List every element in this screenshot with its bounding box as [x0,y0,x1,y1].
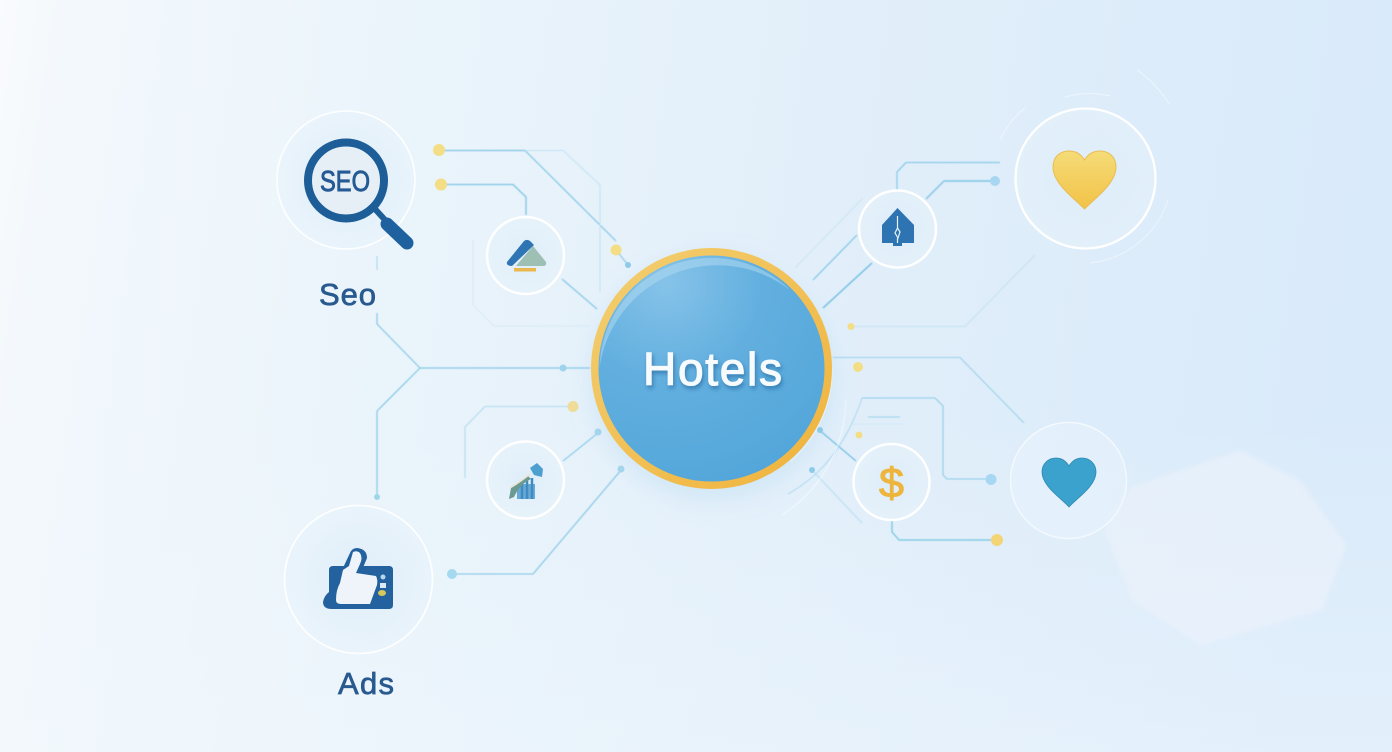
icon: blue heart [1042,458,1096,507]
connectors: seo and ads trunk [377,256,590,497]
translucent hexagon [1105,450,1346,645]
panel: dollar icon node [854,444,930,520]
panel: seo node [277,111,415,249]
panel: house icon node [859,190,936,268]
connector dots [374,144,1003,579]
panel: blue heart node [1010,422,1126,538]
panel: hotels hub [590,248,834,500]
connectors: lower left [452,406,622,574]
icon: dollar sign: $ [879,459,904,506]
decorative orbit arcs [782,70,1170,515]
connectors: upper right [795,162,1035,326]
icon: house [882,208,914,246]
icon: yellow heart [1053,151,1116,209]
connector lines [377,150,1035,574]
icon: rising chart [509,463,543,499]
heading: seo label: Seo [319,277,376,312]
panel: chart icon node [487,442,564,518]
connectors: upper left [439,150,628,326]
heading: hotels: Hotels [643,343,782,395]
panel: triangle icon node [487,217,564,294]
connectors: lower right [788,358,1024,540]
icon: folded triangle [507,240,546,272]
panel: yellow heart node [1016,108,1156,248]
icon: thumbs up on screen [323,548,393,609]
icon: magnifying glass: SEO [320,166,370,198]
panel: ads node [284,506,432,654]
heading: ads label: Ads [338,666,394,701]
